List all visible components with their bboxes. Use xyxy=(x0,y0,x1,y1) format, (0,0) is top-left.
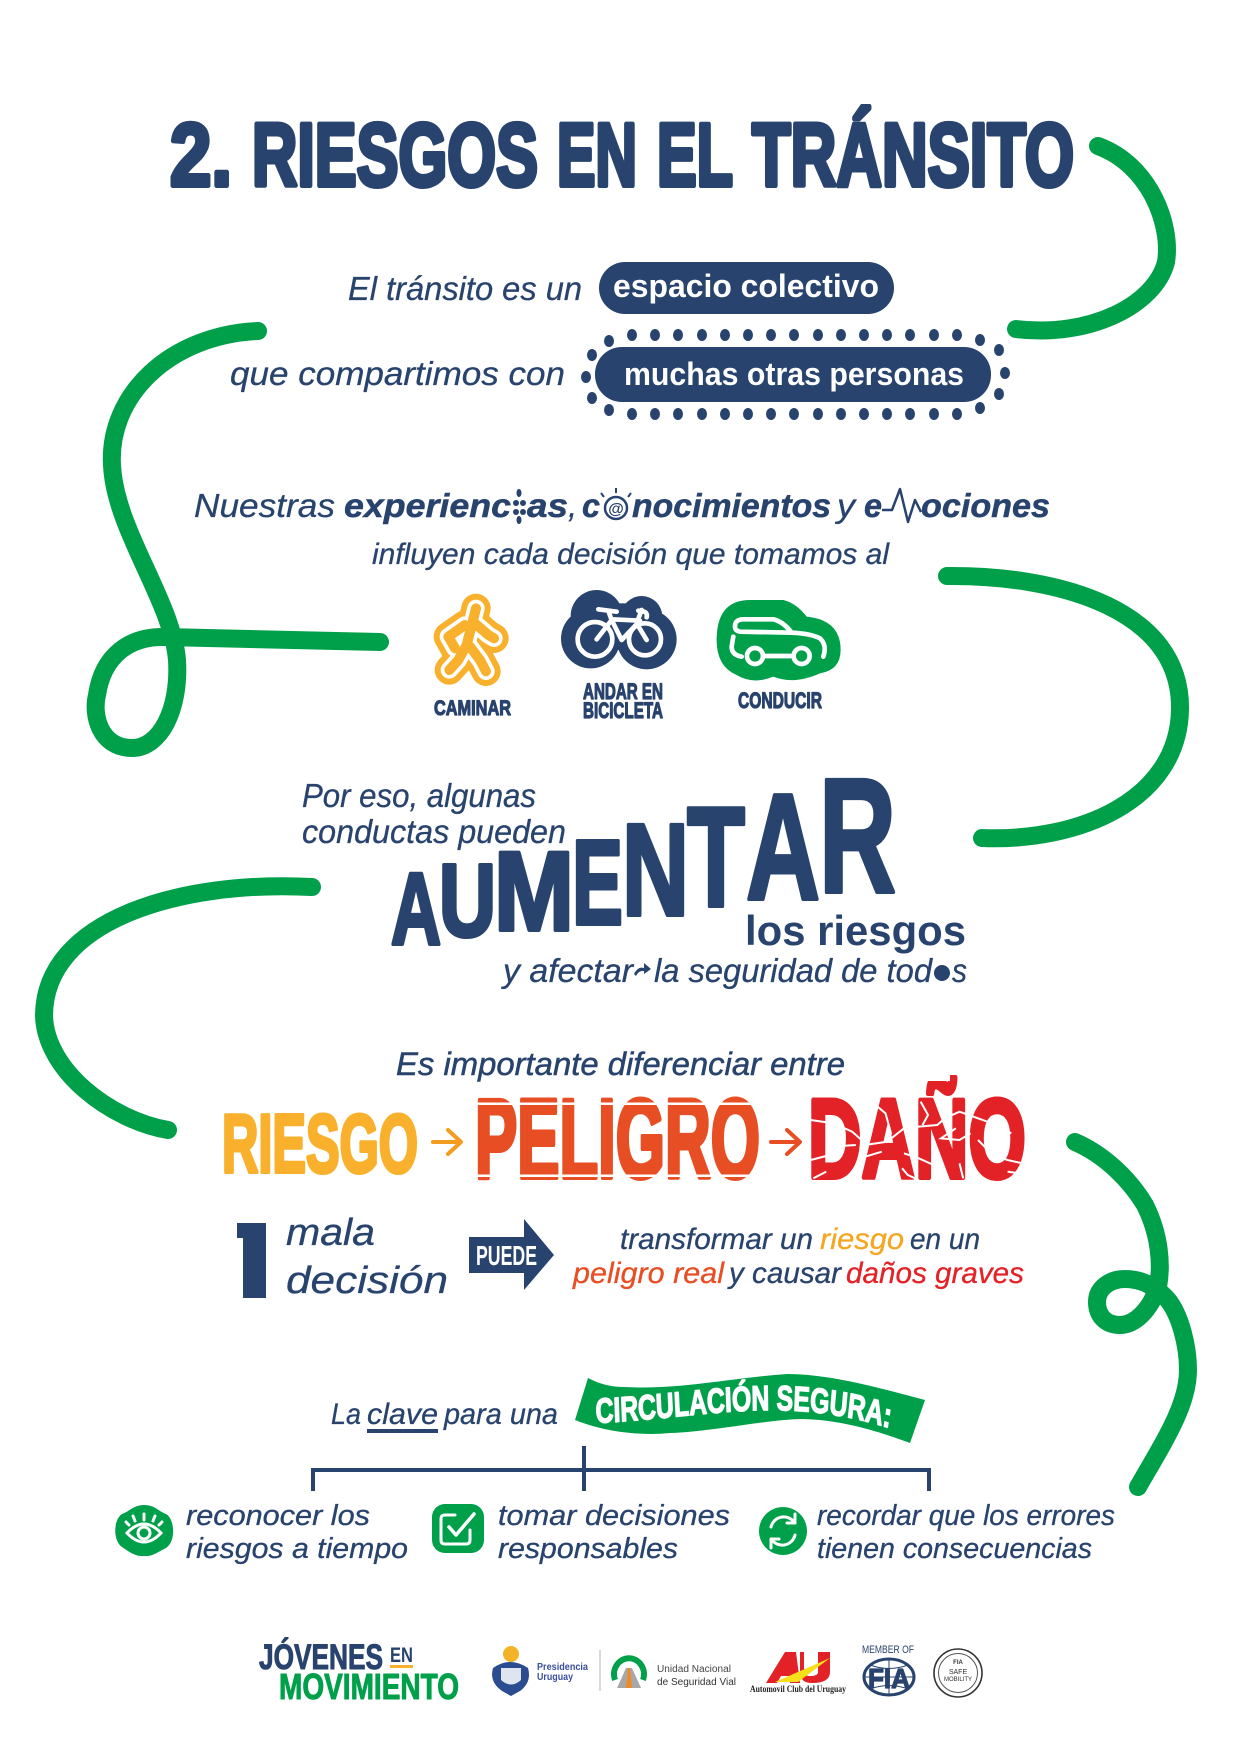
icon: caminar xyxy=(434,608,511,720)
number: 1 mala decisión: decisión xyxy=(286,1260,448,1302)
logo: member of fia xyxy=(862,1644,914,1695)
text: es importante diferenciar entre: Es importante diferenciar entre xyxy=(396,1046,845,1082)
intro line 2: que compartimos con xyxy=(230,355,565,392)
big word: AUMENTAR: N xyxy=(622,796,689,943)
icon: eye xyxy=(115,1505,173,1556)
title xyxy=(170,104,1074,204)
item: recordar que los errores xyxy=(759,1500,1115,1565)
logo: safe mobility: FIA xyxy=(953,1660,963,1666)
text: la clave para una xyxy=(331,1398,558,1433)
text: transformar un riesgo: transformar un xyxy=(620,1223,813,1256)
text: y afectar la seguridad de todos: y afectar xyxy=(501,952,635,989)
big word: AUMENTAR: R xyxy=(819,744,896,927)
icon: conducir xyxy=(717,600,841,713)
text: la clave para una: para una xyxy=(443,1398,558,1431)
divider between logos xyxy=(600,1650,601,1691)
text: influyen: influyen cada decisión que tomamos al xyxy=(372,538,890,571)
icon: lightbulb o: @ xyxy=(608,501,624,518)
pill: muchas otras personas with dotted ring: muchas otras personas xyxy=(624,356,964,392)
text: transformar un riesgo: daños graves xyxy=(846,1257,1024,1290)
big word: AUMENTAR: E xyxy=(572,814,623,950)
green curve: middle left xyxy=(44,886,312,1130)
item: tomar decisiones xyxy=(432,1500,730,1565)
text: transformar un riesgo: riesgo xyxy=(820,1223,904,1256)
icon: bicicleta: ANDAR EN xyxy=(583,679,663,704)
big word: AUMENTAR: U xyxy=(439,843,496,958)
text: experiencias, conocimientos y emociones: as xyxy=(527,487,568,524)
icon: bicicleta: BICICLETA xyxy=(583,698,663,723)
big word: AUMENTAR: A xyxy=(746,762,820,931)
logo: safe mobility: SAFE xyxy=(949,1669,967,1676)
logo: jóvenes en movimiento: JÓVENES xyxy=(259,1637,383,1677)
text: transformar un riesgo xyxy=(572,1223,1024,1290)
green curve: top right xyxy=(1016,146,1167,330)
item: recordar que los errores: recordar que los errores xyxy=(817,1500,1115,1532)
intro line 2 xyxy=(230,329,1010,420)
text: experiencias, conocimientos y emociones: y xyxy=(835,487,858,524)
banner: circulación segura: CIRCULACIÓN SEGURA: xyxy=(596,1379,891,1428)
item: tomar decisiones: responsables xyxy=(498,1533,678,1565)
word: peligro: PELIGRO xyxy=(475,1076,760,1202)
icon: heartbeat line xyxy=(882,489,921,522)
text: experiencias, conocimientos y emociones xyxy=(194,487,1050,524)
text: y afectar la seguridad de todos xyxy=(501,952,967,989)
text: experiencias, conocimientos y emociones: c xyxy=(582,487,600,524)
arrow: puede: PUEDE xyxy=(476,1240,537,1271)
logo: jóvenes en movimiento: MOVIMIENTO xyxy=(279,1666,459,1707)
logo: automóvil club del uruguay xyxy=(750,1652,846,1694)
icon: chain in the letter i xyxy=(513,489,526,524)
title: EL xyxy=(657,104,733,204)
text: experiencias, conocimientos y emociones: Nuestras xyxy=(194,487,335,524)
number: 1 mala decisión: mala xyxy=(286,1212,375,1254)
big word: AUMENTAR: M xyxy=(494,829,574,954)
word: daño with cracks: DAÑO xyxy=(808,1076,1026,1202)
text: experiencias, conocimientos y emociones: nocimientos xyxy=(632,487,831,524)
item: reconocer los riesgos: riesgos a tiempo xyxy=(186,1533,408,1565)
green curve: middle right xyxy=(947,576,1180,838)
icon: caminar: CAMINAR xyxy=(434,697,511,720)
text: la clave para una: clave xyxy=(367,1398,438,1431)
logo: automóvil club del uruguay: Automovil Club del Uruguay xyxy=(750,1684,846,1694)
logo: presidencia uruguay: Presidencia xyxy=(537,1662,588,1673)
banner: circulación segura xyxy=(575,1374,925,1443)
text: y afectar la seguridad de todos: la seguridad de tod xyxy=(654,952,934,989)
bracket connector xyxy=(313,1446,929,1491)
green curve: left loop xyxy=(96,331,380,748)
text: transformar un riesgo: y causar xyxy=(727,1257,842,1290)
word: daño with cracks xyxy=(808,1066,1026,1202)
big word: AUMENTAR: T xyxy=(687,778,745,937)
title: 2. xyxy=(170,104,232,204)
intro line 1 xyxy=(348,262,894,314)
arrow: peligro to daño xyxy=(771,1130,800,1154)
icon: check box xyxy=(432,1504,484,1553)
intro line 1: El tránsito es un xyxy=(348,270,582,307)
text: experiencias, conocimientos y emociones: , xyxy=(568,487,577,524)
word: riesgo: RIESGO xyxy=(222,1097,418,1190)
item: reconocer los riesgos xyxy=(115,1500,408,1565)
green curve: lower right loop xyxy=(1075,1142,1188,1487)
logo: safe mobility xyxy=(934,1649,982,1697)
arrow: puede xyxy=(469,1219,554,1290)
icon: conducir: CONDUCIR xyxy=(738,688,822,713)
item: tomar decisiones: tomar decisiones xyxy=(498,1500,730,1532)
logo: unasev: Unidad Nacional xyxy=(657,1664,731,1675)
title: EN xyxy=(557,104,637,204)
text: experiencias, conocimientos y emociones: e xyxy=(864,487,882,524)
icon: bicicleta xyxy=(561,590,677,723)
title: TRÁNSITO xyxy=(752,104,1074,204)
text: los riesgos: los riesgos xyxy=(745,907,966,954)
logo: presidencia uruguay xyxy=(492,1646,588,1696)
title: RIESGOS xyxy=(252,104,538,204)
item: reconocer los riesgos: reconocer los xyxy=(186,1500,370,1532)
logo: jóvenes en movimiento: EN xyxy=(390,1644,413,1667)
pill: espacio colectivo xyxy=(599,262,894,314)
logo: unasev: de Seguridad Vial xyxy=(657,1677,736,1688)
logo: member of fia: FIA xyxy=(868,1663,910,1694)
text: transformar un riesgo: en un xyxy=(910,1223,980,1256)
big word: AUMENTAR: A xyxy=(391,852,441,966)
logo: safe mobility: MOBILITY xyxy=(944,1677,972,1683)
arrow: riesgo to peligro xyxy=(433,1130,461,1154)
text: por eso algunas conductas pueden: conductas pueden xyxy=(302,813,566,850)
icon: lightbulb o xyxy=(601,488,631,519)
text: por eso algunas conductas pueden xyxy=(302,777,566,850)
icon: small arrow xyxy=(634,963,651,976)
logo: member of fia: MEMBER OF xyxy=(862,1644,914,1656)
text: la clave para una: La xyxy=(331,1398,361,1431)
text: experiencias, conocimientos y emociones: experienc xyxy=(344,487,511,524)
logo: presidencia uruguay: Uruguay xyxy=(537,1672,573,1683)
item: recordar que los errores: tienen consecuencias xyxy=(817,1533,1092,1565)
icon: refresh xyxy=(759,1507,807,1555)
big word: AUMENTAR xyxy=(391,744,896,966)
text: y afectar la seguridad de todos: s xyxy=(952,952,967,989)
pill: muchas otras personas with dotted ring xyxy=(581,329,1010,420)
logo: jóvenes en movimiento xyxy=(259,1637,459,1707)
text: experiencias, conocimientos y emociones: ociones xyxy=(921,487,1050,524)
text: por eso algunas conductas pueden: Por eso, algunas xyxy=(302,777,536,814)
pill: espacio colectivo: espacio colectivo xyxy=(613,268,879,304)
number: 1 mala decisión xyxy=(237,1212,448,1302)
text: transformar un riesgo: peligro real xyxy=(572,1257,725,1290)
logo: unasev xyxy=(614,1658,736,1688)
icon: dot xyxy=(934,965,950,981)
